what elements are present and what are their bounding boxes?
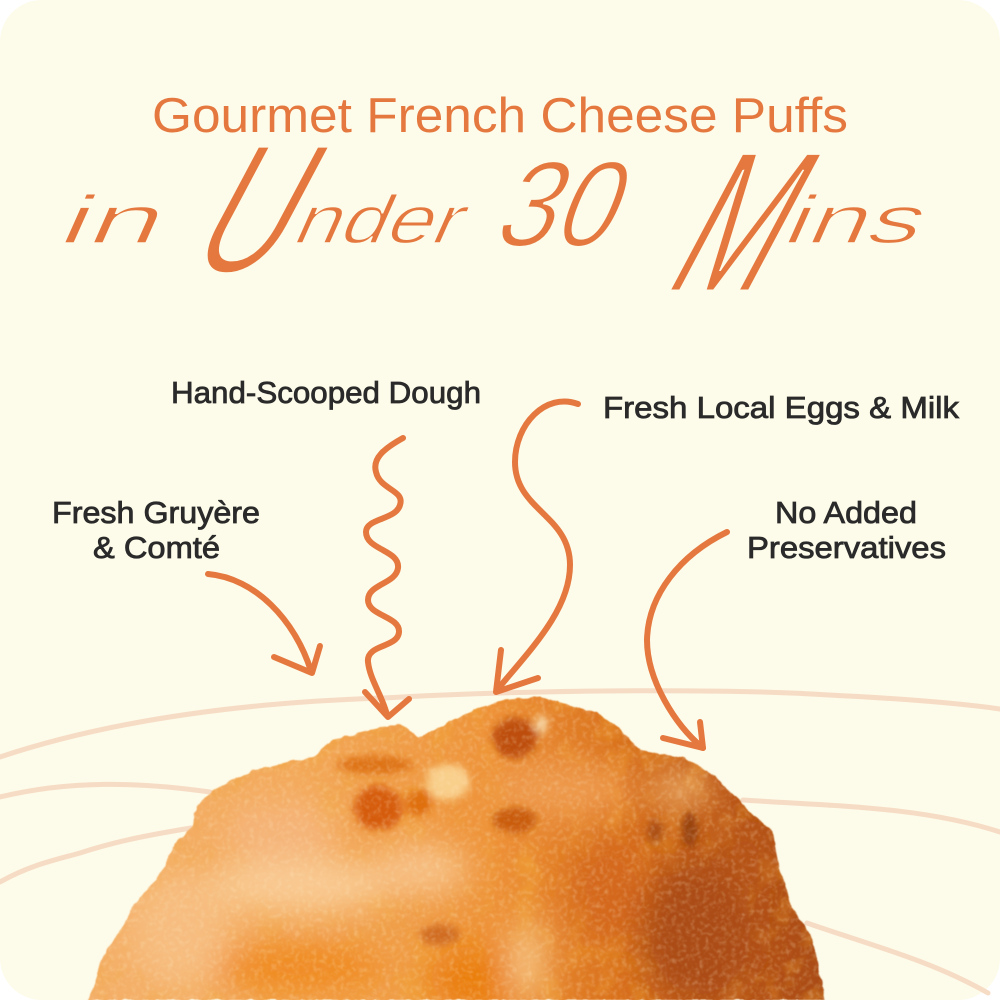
arrow: gruyere bbox=[208, 574, 320, 673]
arrow: wiggly dough bbox=[365, 438, 409, 717]
arrow: eggs and milk bbox=[496, 401, 578, 692]
label: No Added Preservatives: No Added bbox=[775, 495, 917, 530]
label: Hand-Scooped Dough: Hand-Scooped Dough bbox=[171, 375, 481, 410]
cheese puff bbox=[80, 690, 830, 1000]
title script line bbox=[48, 107, 942, 334]
title script line: ins bbox=[773, 182, 942, 258]
title script line: M bbox=[637, 111, 854, 334]
plate lines bbox=[0, 691, 1000, 993]
label: Fresh Local Eggs & Milk: Fresh Local Eggs & Milk bbox=[603, 390, 960, 425]
title script line: 30 bbox=[480, 135, 653, 272]
label: Fresh Gruyère & Comté bbox=[52, 495, 260, 565]
arrow: preservatives bbox=[647, 532, 727, 748]
label: Fresh Gruyère & Comté: Fresh Gruyère bbox=[52, 495, 260, 530]
title script line: in bbox=[48, 182, 182, 258]
label: No Added Preservatives bbox=[747, 495, 946, 565]
label: Fresh Gruyère & Comté: & Comté bbox=[93, 530, 220, 565]
title script line: U bbox=[161, 107, 360, 311]
title line one: Gourmet French Cheese Puffs bbox=[152, 89, 848, 143]
label: No Added Preservatives: Preservatives bbox=[747, 530, 946, 565]
title script line: nder bbox=[283, 182, 482, 258]
